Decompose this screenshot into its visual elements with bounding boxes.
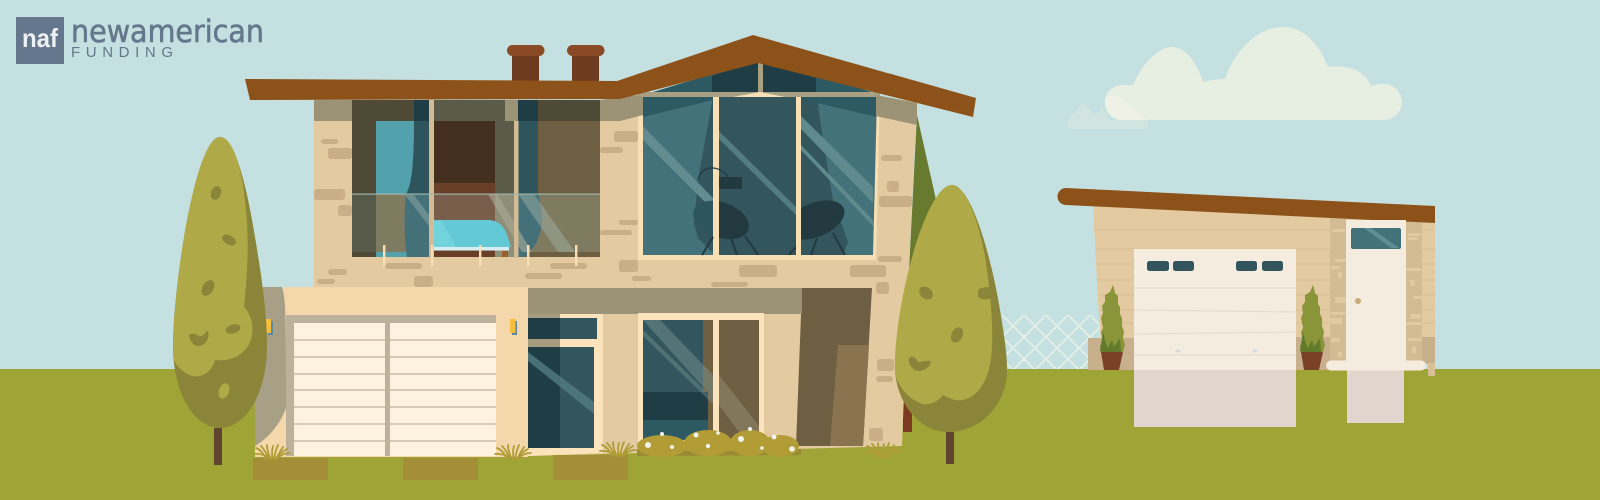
dark side opening [796,288,872,446]
leaves [189,185,241,346]
leaves [909,284,993,371]
trunk [946,432,954,464]
logo wordmark: newamerican [71,14,264,50]
canopy light [895,185,992,404]
roof [1058,188,1435,223]
planter beds [253,455,628,480]
logo mark: naf [22,23,58,53]
railing pickets [383,245,577,266]
cloud overlap [1105,95,1148,120]
cloud: small [1067,104,1148,129]
wall lamp left [266,319,273,335]
background green tree behind house [908,115,945,290]
cloud: large [1104,27,1402,120]
railing top [352,194,600,195]
chain-link fence [1002,315,1102,370]
main house [245,35,976,457]
canopy dark [173,137,267,428]
tree right [895,185,1007,464]
window frame [638,92,880,260]
garage building [1058,188,1435,427]
garage door panels [294,323,496,456]
logo subline: FUNDING [71,44,173,61]
chimney left [507,45,544,84]
sky background [0,0,1600,370]
roof shadow band on wall [314,95,917,125]
garage door [1134,249,1296,427]
canopy light [173,137,252,376]
garage stone base [1088,337,1435,370]
right side of window [488,100,600,257]
chair legs left [702,237,713,255]
grass tufts [254,442,901,459]
table arc [698,168,728,180]
front door [528,314,603,456]
sliding glass door [638,313,764,443]
logo mark [16,17,64,64]
canopy dark [895,185,1007,432]
entry door [1326,220,1435,423]
window posts [429,100,434,258]
lower wall [528,287,908,456]
logo [16,14,264,64]
chimney right [567,45,604,84]
big gable window [638,60,880,260]
main roof [245,35,976,117]
flowering shrubs [637,427,801,457]
right pane [801,97,877,255]
garage facade [254,287,528,457]
trunk [214,428,222,465]
side shadow [255,408,286,457]
potted plant right [1300,285,1325,370]
light box in opening [830,345,869,446]
wall lamp right [510,319,517,335]
garage siding [1093,205,1435,345]
mid floor shadow band [528,288,802,314]
tree trunk shadow post [903,403,912,432]
gable glass [653,60,872,93]
tree left [173,137,267,465]
left curtain [405,100,429,257]
upper wall [314,100,917,290]
left pane [643,97,713,255]
stone door surround [1330,218,1422,370]
garage door frame [286,315,496,456]
potted plant left [1100,285,1125,370]
middle room [434,100,518,257]
bed [434,220,511,250]
upper left balcony window [352,100,600,266]
middle pane [719,97,796,255]
grass [0,369,1600,500]
wall bricks [314,131,912,441]
